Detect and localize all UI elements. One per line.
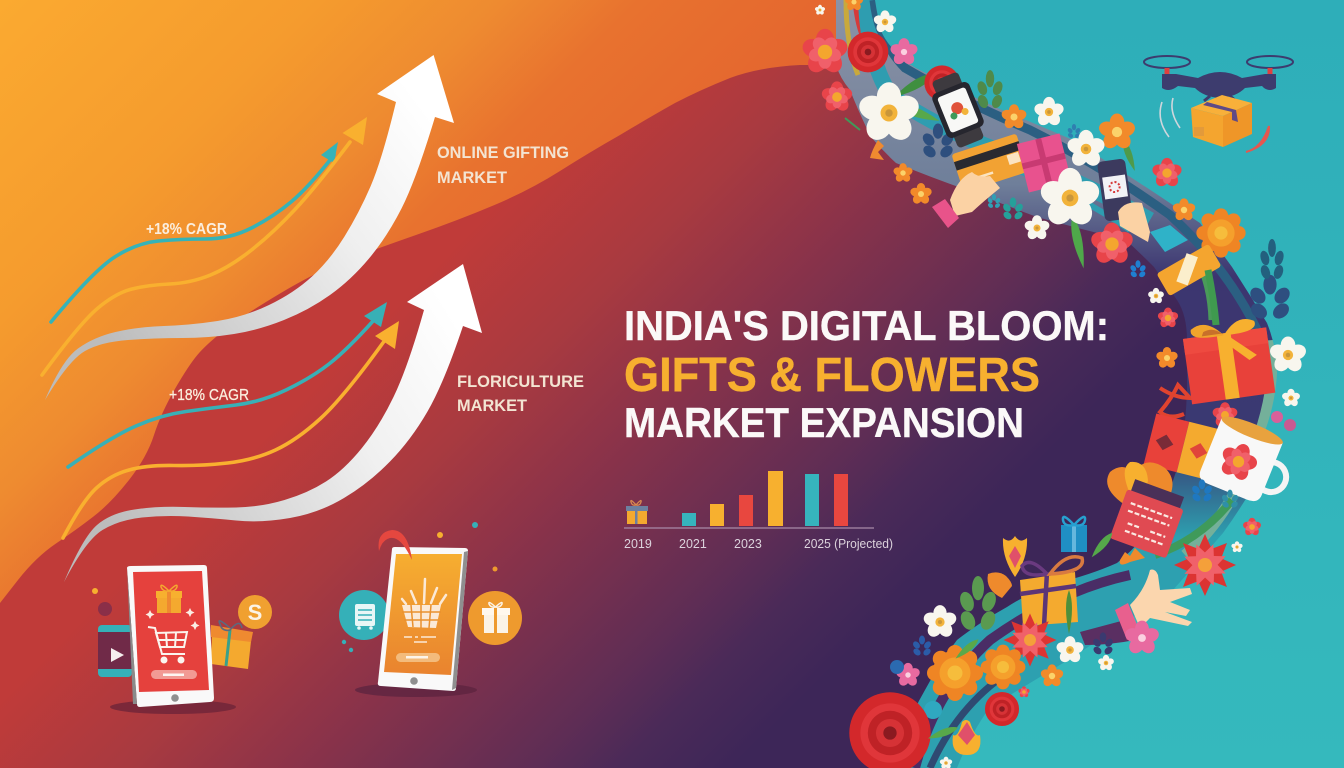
bar chart [624,471,893,551]
upper CAGR label: +18% CAGR [146,221,227,238]
label: online gifting market: ONLINE GIFTING [437,143,569,162]
icon: smartwatch [926,69,990,151]
lower yellow trend line [63,321,399,538]
bar chart: 2019 [624,537,652,551]
left phone with cart [92,565,272,714]
title: MARKET EXPANSION [624,399,1024,446]
icon: pink gift box [1017,133,1072,193]
right phone with basket [339,522,522,697]
title [624,302,1109,446]
icon: hand holding card [932,172,1000,228]
upper yellow trend line [42,117,367,375]
bar chart: 2023 [734,537,762,551]
icon: red and yellow gift [1144,414,1222,480]
label: online gifting market: MARKET [437,168,508,187]
icon: reaching hand [1080,570,1192,645]
bar chart: 2021 [679,537,707,551]
lower teal trend line [68,302,387,467]
lower-left flowers [890,536,1161,726]
orange wave region [0,0,836,603]
title: GIFTS & FLOWERS [624,349,1040,402]
icon: dollar coin [238,595,272,629]
tulip and leaf by the rose [927,720,980,768]
bar chart: 2025 (Projected) [804,537,893,551]
icon: shopping cart [148,627,187,662]
upper teal trend line [51,142,338,322]
flower cluster near hand [1089,479,1262,565]
icon: credit card [951,133,1029,193]
icon: delivery drone with parcel [1144,56,1293,152]
label: floriculture market: MARKET [457,396,528,415]
teal background region [875,0,1344,768]
icon: shopping basket [402,579,446,628]
icon: teal receipt badge [339,590,389,640]
icon: red swoosh [379,530,412,560]
title: INDIA'S DIGITAL BLOOM: [624,302,1109,349]
label: floriculture market: FLORICULTURE [457,372,584,391]
icon: gift box [211,621,253,669]
icon: wrapped parcel [1155,241,1221,296]
icon: video card [98,625,132,677]
icon: screen gift [156,585,182,613]
upper-arc flowers [800,0,1196,278]
lower-arc flowers and gifts [1155,239,1308,431]
icon: phone in hand [1097,158,1188,252]
lower growth arrow: floriculture [64,264,482,582]
upper growth arrow: online gifting [45,55,454,400]
icon: big red rose [849,692,931,768]
icon: blue gift [1061,517,1087,552]
icon: dollar coin: S [248,600,262,625]
icon: card pack with petals [1107,462,1188,558]
icon: orange gift badge [468,591,522,645]
icon: flower mug [1197,412,1301,510]
icon: chart gift [626,501,648,524]
icon: red gift with bow [1181,316,1275,404]
ribbon band [836,0,1344,768]
lower CAGR label: +18% CAGR [169,387,249,404]
